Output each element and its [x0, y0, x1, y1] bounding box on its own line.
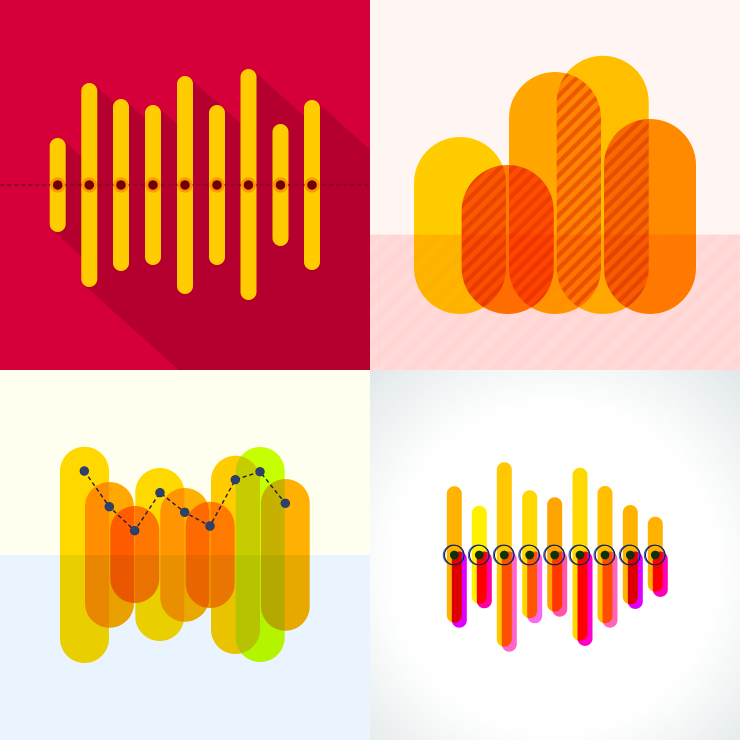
capsule: amber tallest — [557, 56, 649, 314]
hatched overlap: dark orange and amber — [604, 119, 649, 308]
capsule: yellow — [414, 137, 506, 314]
dashed baseline — [0, 184, 370, 186]
capsule: red-orange front — [462, 165, 554, 314]
panel: translucent capsules with dashed line — [0, 370, 370, 740]
capsule: orange tall — [509, 72, 579, 314]
long shadows — [52, 71, 370, 370]
yellow bars — [50, 69, 320, 300]
panel: crimson flat bars with long shadow — [0, 0, 370, 370]
trend dots — [80, 467, 290, 535]
green dots — [450, 551, 660, 559]
baseline dots — [50, 177, 320, 193]
capsule group — [60, 447, 310, 663]
blue rings — [443, 545, 664, 565]
panel: overlapping wide capsules with hatching — [370, 0, 740, 370]
striped floor — [370, 234, 740, 370]
capsule: dark orange — [604, 119, 696, 314]
hatched overlap: front and orange — [509, 165, 554, 308]
hatched overlap: front and yellow — [462, 165, 506, 308]
panel: thin bars on white glow — [370, 370, 740, 740]
front offset bars — [452, 552, 668, 652]
black rings — [444, 545, 665, 565]
hatched overlap: orange and amber — [556, 74, 601, 308]
back bars — [447, 462, 663, 647]
dashed trend line — [88, 473, 282, 528]
